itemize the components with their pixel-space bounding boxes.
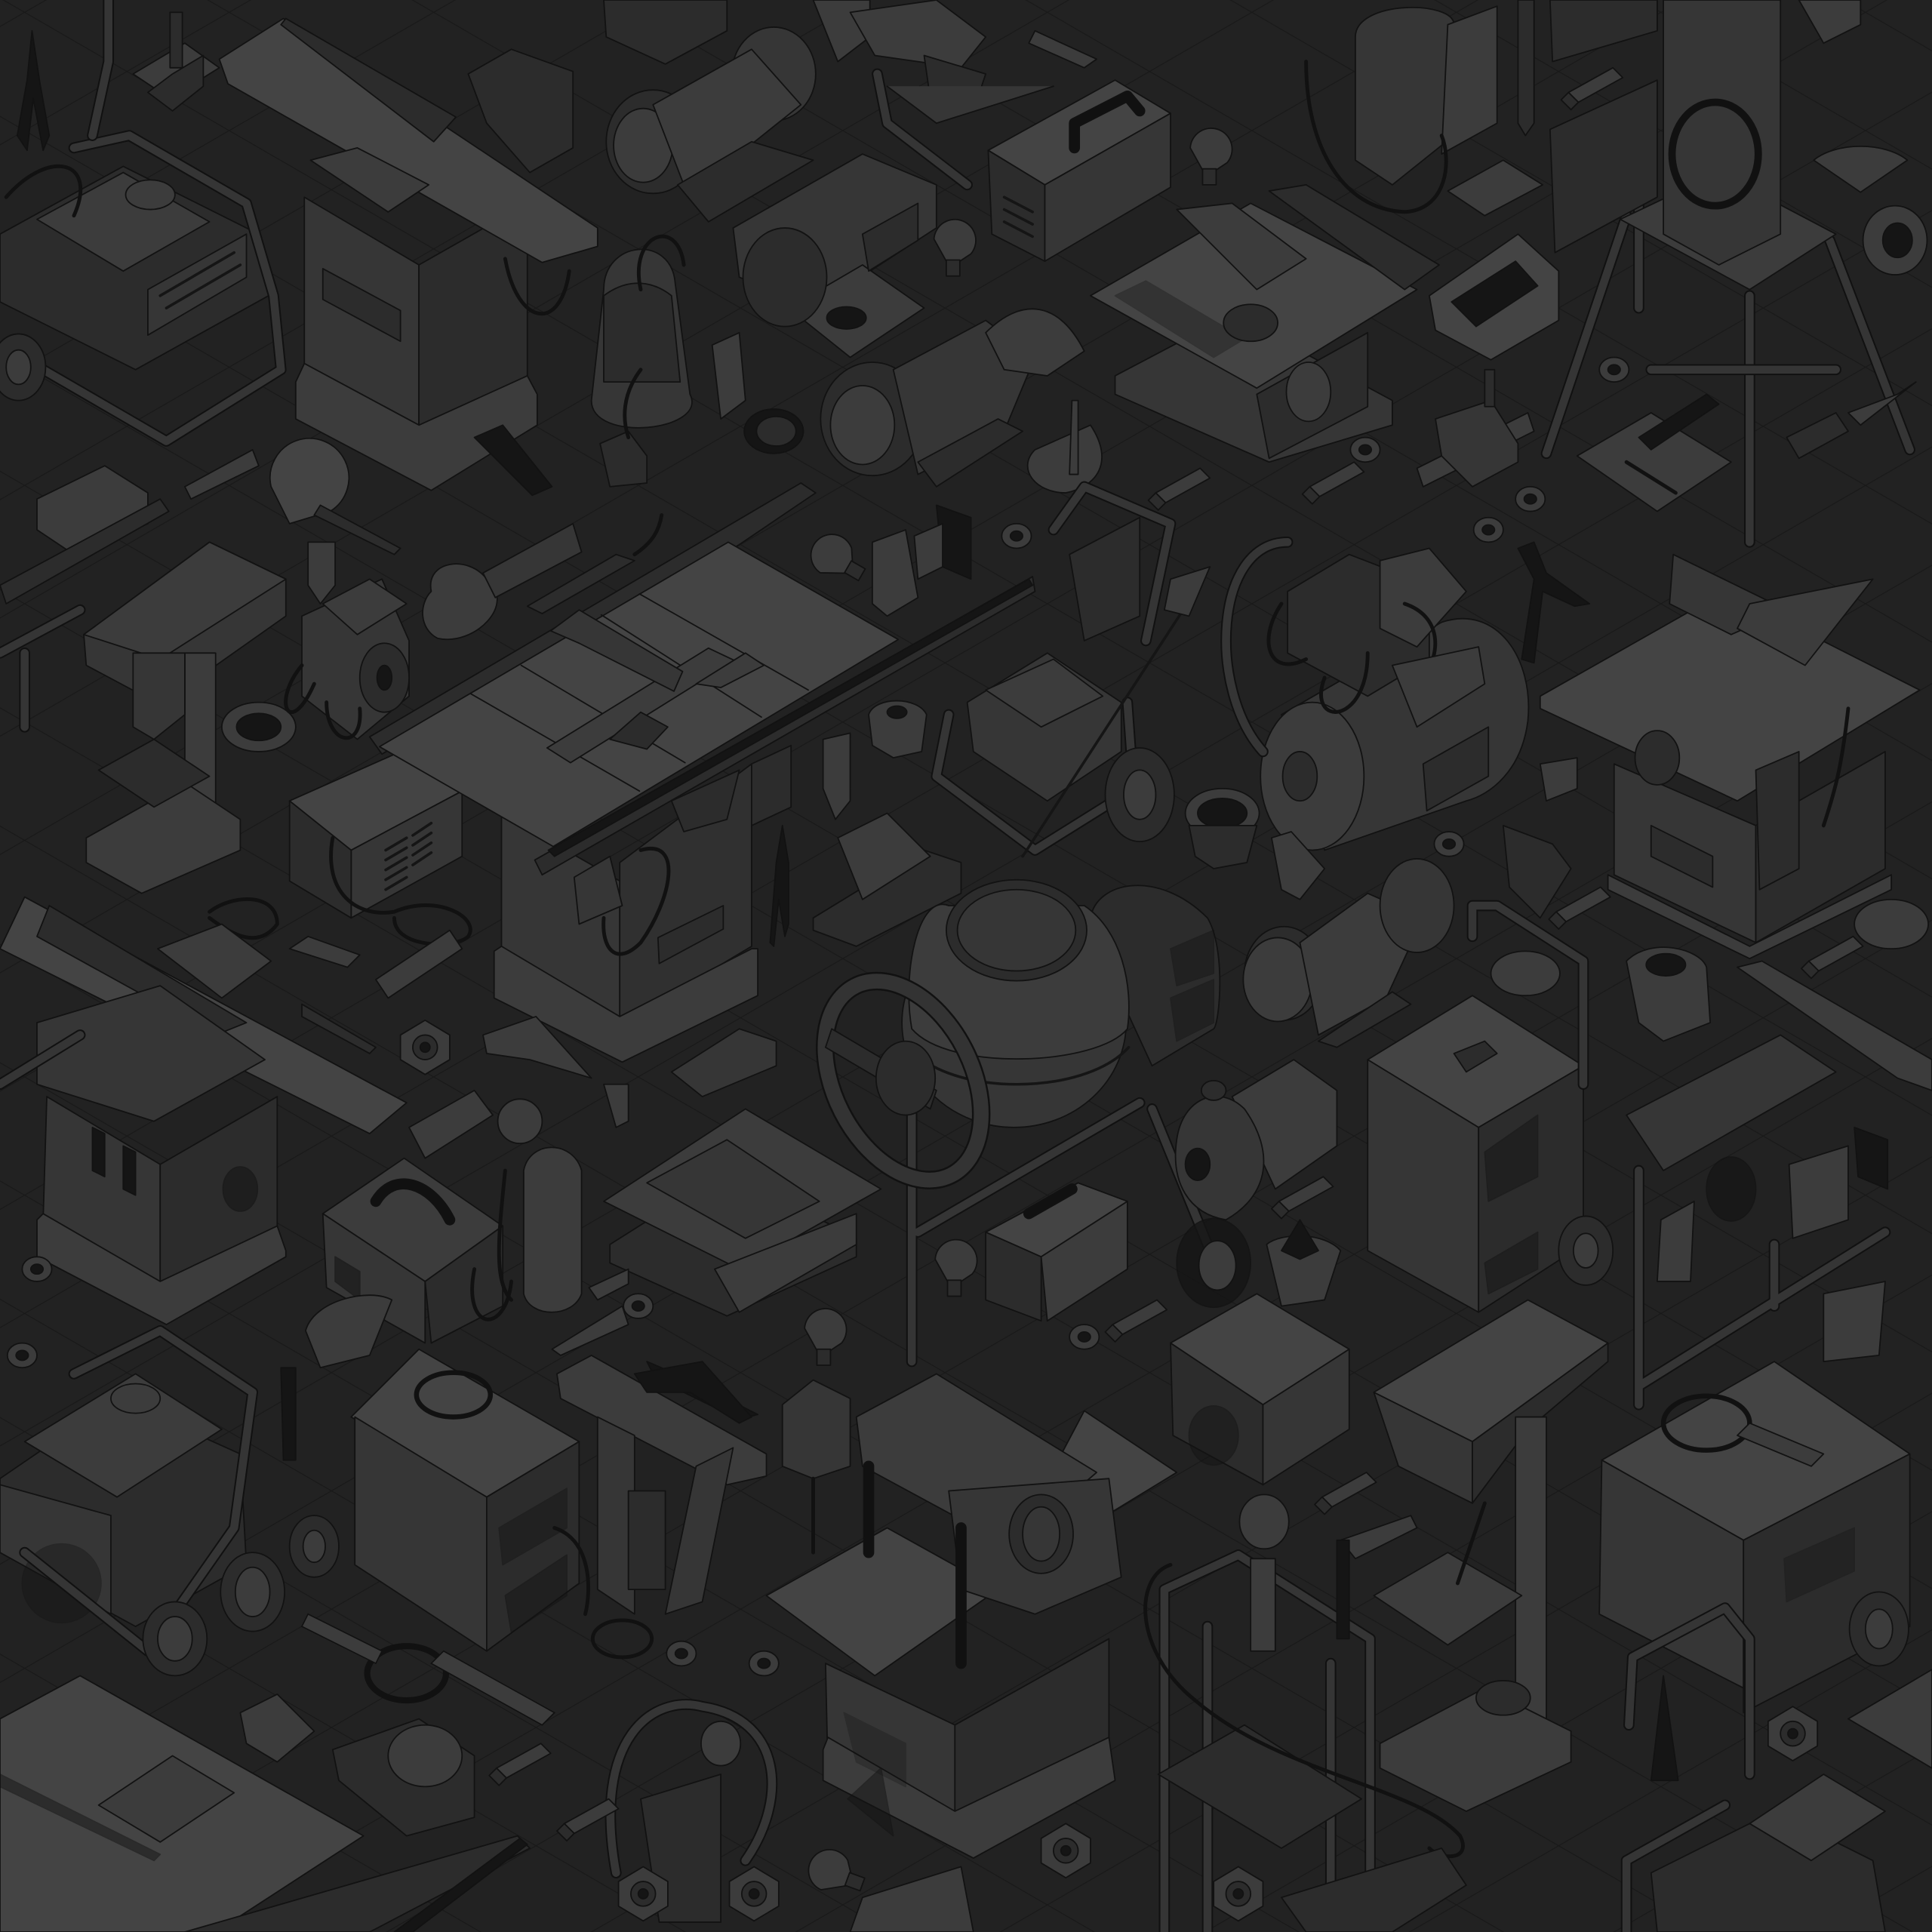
small parts lower middle <box>489 1177 1817 1921</box>
tool: box top <box>604 0 870 64</box>
tool: small welder left <box>210 752 470 944</box>
tool: gas cylinder <box>498 1099 582 1312</box>
tool: MIG welder <box>290 1349 589 1651</box>
tool: fan gauge and clamp <box>1799 0 1927 275</box>
tool: pipe vise <box>1417 370 1534 487</box>
tool: fuel tank sprayer <box>1306 0 1543 216</box>
tool: handle drill top <box>851 0 1097 185</box>
tool: belt sander <box>733 154 937 357</box>
tool: generator top left <box>0 0 281 441</box>
tool: loop frame bottom centre <box>611 1705 974 1932</box>
tool: band saw <box>1546 0 1910 542</box>
tool: cement mixer <box>794 880 1251 1361</box>
tool: long pliers and belt sander <box>770 814 961 946</box>
tool: planer <box>767 1374 1177 1858</box>
tool: drill press right <box>1374 1300 1608 1811</box>
tool: shaper table <box>1540 555 1920 958</box>
tool: bench grinder right <box>1243 859 1454 1048</box>
tool: compact generator <box>1171 1220 1349 1484</box>
tool: hydraulic rack right <box>1626 961 1932 1404</box>
tool: big table saw <box>370 483 1035 1062</box>
bulbs <box>934 128 1232 276</box>
tool: circulator pump <box>286 542 409 740</box>
tool: jointer left <box>0 897 407 1324</box>
small parts upper right <box>1149 68 1629 542</box>
tool: saw cup parts <box>744 401 1102 493</box>
tool: welder top <box>988 80 1171 261</box>
small parts left low <box>8 1257 653 1460</box>
tool: vent drain <box>1429 234 1558 360</box>
tool: tile saw <box>604 1109 881 1316</box>
tool: welder right tall <box>1367 906 1613 1312</box>
tool: cup and drain <box>1186 789 1710 1041</box>
tool: belt sander bottom <box>240 1694 475 1836</box>
tool: pressure washer <box>937 487 1210 857</box>
tool: bulb and switch plates <box>803 505 1032 616</box>
tool: generator lower left <box>0 1331 285 1675</box>
tool: clamp welding parts <box>290 931 777 1158</box>
tool: pliers right <box>1518 542 1589 663</box>
tool: bench grinder middle <box>820 309 1084 487</box>
tool: welder box with cables <box>323 1158 512 1343</box>
tool: welder lower right <box>1599 1361 1932 1774</box>
tool: knob sander <box>423 515 662 639</box>
tool: pressure tank <box>1226 542 1528 851</box>
tool: black cables bottom <box>302 1614 652 1725</box>
tool: small welder centre <box>986 1183 1128 1321</box>
tool: submersible pump <box>592 236 746 487</box>
tool: soldering iron <box>1786 382 1916 458</box>
tool: press bottom <box>1146 1494 1466 1932</box>
small parts right mid <box>1434 758 1928 978</box>
tool: drill press left <box>84 542 296 894</box>
tool: table saw bottom left <box>0 1675 530 1932</box>
tool: wire brush <box>823 701 927 820</box>
tool: hydraulic bender <box>557 1355 767 1614</box>
tool: pliers top left <box>17 31 49 150</box>
tool: vise top <box>133 12 220 111</box>
bulbs lower <box>803 1240 977 1903</box>
tool: generator bottom right <box>1626 1675 1885 1932</box>
tool: centrifugal pump <box>1176 1060 1337 1220</box>
tool: bench grinder top <box>606 27 816 222</box>
tool: jointer top left <box>220 18 598 495</box>
tool: paint tray <box>1577 394 1731 512</box>
tool: table saw top <box>1091 185 1439 462</box>
tool: rod mount left <box>0 438 401 727</box>
tool: control box <box>783 1380 851 1552</box>
